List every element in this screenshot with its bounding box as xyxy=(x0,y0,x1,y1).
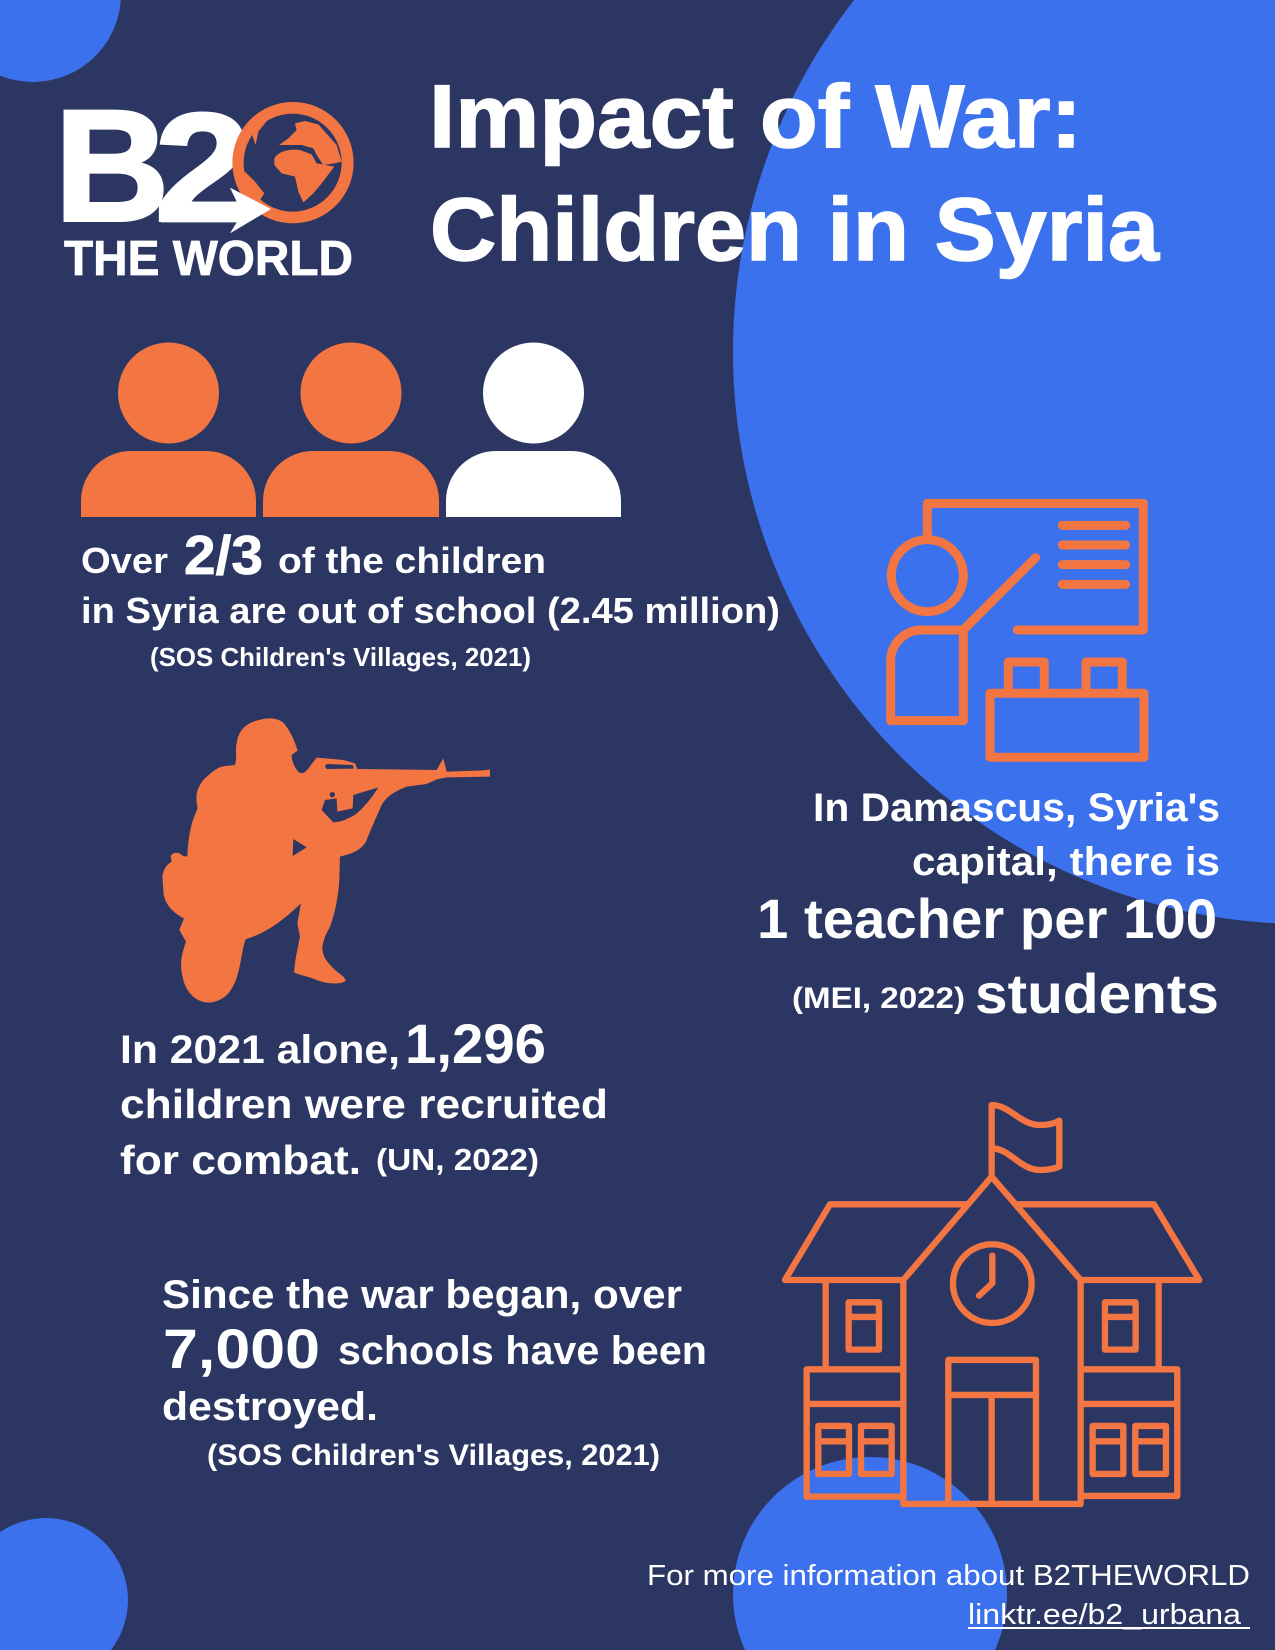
text: child recruitment statistic xyxy=(120,1012,608,1183)
icon: teacher at board with building block xyxy=(891,503,1144,757)
footer: more information and link: linktr.ee/b2_urbana xyxy=(968,1599,1242,1631)
text: teacher ratio statistic: capital, there is xyxy=(912,840,1220,884)
footer: more information and link: For more information about B2THEWORLD xyxy=(647,1560,1250,1592)
text: child recruitment statistic: (UN, 2022) xyxy=(376,1142,539,1177)
logo: B2 The World: THE WORLD xyxy=(64,232,353,286)
text: teacher ratio statistic: 1 teacher per 100 xyxy=(757,887,1217,950)
logo: B2 The World: B xyxy=(54,76,169,254)
text: out of school statistic: Over xyxy=(81,540,168,581)
title: Children in Syria xyxy=(430,179,1161,279)
text: destroyed schools statistic: schools have been xyxy=(338,1329,707,1373)
text: out of school statistic: (SOS Children's Villages, 2021) xyxy=(150,642,531,672)
text: out of school statistic: 2/3 xyxy=(184,524,263,586)
text: out of school statistic: of the children xyxy=(278,540,546,581)
text: destroyed schools statistic: Since the war began, over xyxy=(162,1273,682,1317)
text: destroyed schools statistic: (SOS Children's Villages, 2021) xyxy=(207,1439,660,1472)
text: destroyed schools statistic: 7,000 xyxy=(163,1317,320,1380)
icon: school building with flag and clock xyxy=(785,1105,1199,1504)
text: teacher ratio statistic xyxy=(757,786,1220,1025)
text: child recruitment statistic: In 2021 alone, xyxy=(120,1028,400,1072)
text: out of school statistic xyxy=(81,524,780,672)
title xyxy=(429,66,1161,279)
text: destroyed schools statistic: destroyed. xyxy=(162,1385,378,1429)
logo: B2 The World xyxy=(54,76,354,286)
footer: more information and link xyxy=(647,1560,1250,1631)
text: destroyed schools statistic xyxy=(162,1273,707,1472)
text: out of school statistic: in Syria are out of school (2.45 million) xyxy=(81,590,780,631)
text: child recruitment statistic: children were recruited xyxy=(120,1081,608,1127)
text: child recruitment statistic: 1,296 xyxy=(405,1012,546,1075)
title: Impact of War: xyxy=(429,66,1082,166)
text: teacher ratio statistic: students xyxy=(975,962,1219,1025)
text: child recruitment statistic: for combat. xyxy=(120,1137,361,1183)
icon: three people, two thirds highlighted xyxy=(81,342,621,517)
text: teacher ratio statistic: In Damascus, Syria's xyxy=(813,786,1220,830)
text: teacher ratio statistic: (MEI, 2022) xyxy=(792,982,965,1015)
logo: B2 The World: 2 xyxy=(154,82,252,254)
icon: kneeling soldier with rifle xyxy=(162,718,490,1003)
